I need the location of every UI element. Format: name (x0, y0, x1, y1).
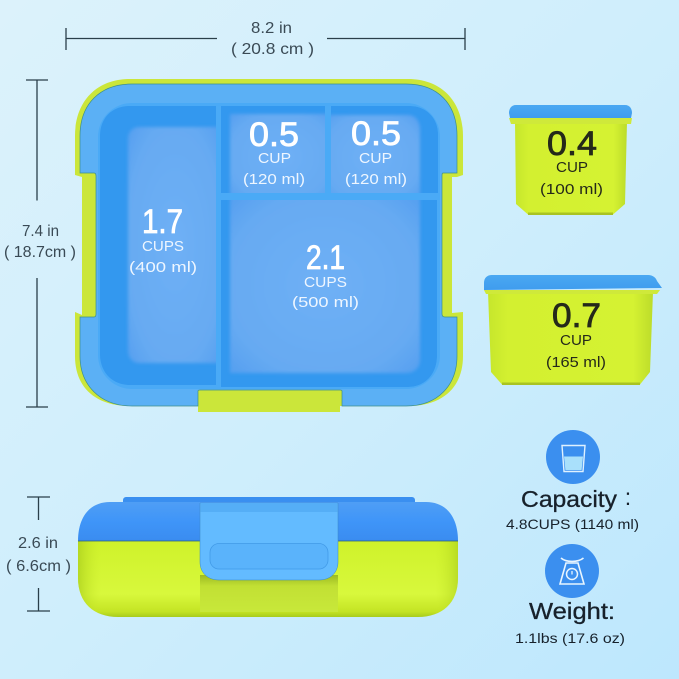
green base outline (75, 79, 463, 412)
latch (200, 503, 338, 580)
tray well (98, 103, 440, 389)
label: 0.5 cup right: (120 ml) (345, 171, 407, 188)
blue lid (78, 502, 458, 541)
label: 2.1 cups: (500 ml) (292, 294, 359, 311)
large container 0.7 cup: 0.7 (552, 297, 601, 335)
small container 0.4 cup: (100 ml) (540, 181, 603, 198)
label: 0.5 cup left (243, 116, 305, 188)
label: 0.5 cup left: CUP (258, 150, 291, 167)
large container 0.7 cup: (165 ml) (546, 354, 606, 371)
dimension: height 7.4 in: ( 18.7cm ) (4, 244, 76, 261)
green base (78, 541, 458, 617)
icon: weight scale (545, 544, 599, 598)
icon: capacity glass (546, 430, 600, 484)
compartment: top right (331, 106, 438, 193)
label: 1.7 cups (129, 203, 197, 276)
label: 0.5 cup right (345, 115, 407, 188)
label: 2.1 cups (292, 239, 359, 311)
label: 2.1 cups: CUPS (304, 274, 347, 291)
weight text (515, 598, 625, 646)
capacity text: : (625, 484, 631, 510)
small container 0.4 cup (509, 105, 632, 215)
dimension: depth 2.6 in: 2.6 in (18, 535, 58, 552)
compartment: left (99, 105, 222, 386)
dimension: depth 2.6 in: ( 6.6cm ) (6, 558, 71, 575)
large container 0.7 cup (484, 275, 662, 385)
weight text: Weight: (529, 598, 615, 624)
label: 1.7 cups: CUPS (142, 238, 184, 255)
compartment: top middle (221, 106, 325, 193)
capacity text (506, 484, 639, 532)
dimension: depth 2.6 in (6, 497, 71, 611)
latch strap (200, 575, 338, 612)
dimension: height 7.4 in (4, 80, 76, 407)
label: 0.5 cup left: 0.5 (249, 116, 299, 154)
label: 0.5 cup left: (120 ml) (243, 171, 305, 188)
capacity text: 4.8CUPS (1140 ml) (506, 516, 639, 532)
dimension: width 8.2 in: ( 20.8 cm ) (231, 41, 314, 58)
label: 0.5 cup right: 0.5 (351, 115, 401, 153)
large container 0.7 cup: CUP (560, 332, 592, 349)
top view lunch box tray (75, 79, 463, 412)
side view of lunch box (78, 497, 458, 617)
dimension: width 8.2 in: 8.2 in (251, 20, 292, 37)
weight text: 1.1lbs (17.6 oz) (515, 630, 625, 646)
capacity text: Capacity (521, 486, 618, 512)
dimension: height 7.4 in: 7.4 in (22, 223, 59, 240)
label: 1.7 cups: 1.7 (142, 203, 183, 241)
small container 0.4 cup: CUP (556, 159, 588, 176)
dimension: width 8.2 in (66, 20, 465, 58)
blue lid rim (80, 84, 457, 406)
label: 0.5 cup right: CUP (359, 150, 392, 167)
label: 1.7 cups: (400 ml) (129, 259, 197, 276)
label: 2.1 cups: 2.1 (306, 239, 345, 277)
small container 0.4 cup: 0.4 (547, 125, 597, 163)
lid top strip (123, 497, 415, 505)
compartment: bottom (221, 196, 437, 387)
